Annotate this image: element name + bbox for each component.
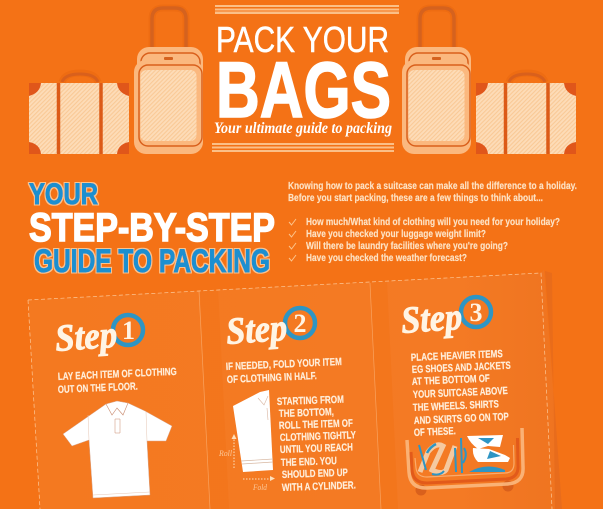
step 1 text (58, 366, 177, 396)
panel: step 1 (54, 314, 177, 498)
arrows: roll and fold: Fold (252, 483, 268, 492)
step 1 text: OUT ON THE FLOOR. (58, 381, 138, 396)
heading: your step-by-step guide to packing: STEP-BY-STEP (29, 206, 275, 250)
title block: PACK YOUR (216, 19, 389, 60)
icon: polo shirt (63, 401, 172, 498)
checklist: Have you checked the weather forecast? (306, 253, 467, 264)
checklist: Will there be laundry facilities where you're going? (306, 241, 508, 252)
checklist: Have you checked your luggage weight limit? (306, 229, 486, 240)
step 2 instructions: THE BOTTOM, (279, 406, 334, 420)
step 2 instructions: CLOTHING TIGHTLY (280, 429, 356, 444)
step 2 intro text (226, 356, 342, 386)
step 3 instructions: OF THESE. (414, 425, 456, 439)
icon: right trolley case (402, 8, 471, 154)
panel: step 3 (400, 296, 523, 496)
arrows: roll and fold: Roll (218, 449, 233, 458)
step 2 instructions: SHOULD END UP (282, 467, 348, 481)
step 3 instructions: EG SHOES AND JACKETS (412, 360, 511, 376)
step 1 number badge (113, 315, 143, 345)
step 3 heading: Step (400, 296, 463, 342)
title block: Your ultimate guide to packing (214, 120, 392, 137)
step 2 intro text: OF CLOTHING IN HALF. (227, 370, 317, 386)
step 3 instructions (411, 348, 511, 439)
title block (212, 5, 399, 152)
title block: BAGS (216, 45, 391, 134)
step 3 instructions: PLACE HEAVIER ITEMS (411, 348, 503, 364)
intro text: Before you start packing, these are a few things to think about... (288, 193, 543, 204)
heading: your step-by-step guide to packing (29, 178, 275, 279)
heading: your step-by-step guide to packing: GUIDE TO PACKING (34, 243, 270, 279)
panel: step 2 (218, 307, 356, 494)
step 2 heading: Step (225, 307, 288, 353)
arrows: roll and fold (218, 434, 275, 492)
step 3 instructions: AT THE BOTTOM OF (412, 373, 490, 388)
step 3 instructions: AND SKIRTS GO ON TOP (414, 411, 509, 427)
checklist (289, 217, 560, 264)
heading: your step-by-step guide to packing: YOUR (29, 178, 98, 211)
step 3 number badge (461, 297, 491, 327)
step 2 instructions (277, 394, 356, 494)
step 2 instructions: STARTING FROM (277, 394, 344, 408)
step 1 text: LAY EACH ITEM OF CLOTHING (58, 366, 177, 383)
icon: right suitcase (476, 73, 576, 154)
step 2 instructions: THE END. YOU (281, 455, 337, 469)
step 2 instructions: UNTIL YOU REACH (280, 441, 353, 456)
icon: left trolley case (134, 8, 203, 154)
step 1 number badge: 1 (122, 316, 135, 345)
step 3 instructions: YOUR SUITCASE ABOVE (413, 385, 508, 401)
icon: open suitcase with shoes (407, 428, 523, 496)
icon: left suitcase (29, 73, 129, 154)
checklist: How much/What kind of clothing will you need for your holiday? (306, 217, 560, 228)
step 3 number badge: 3 (470, 298, 482, 327)
step 2 number badge (285, 308, 315, 338)
step 2 instructions: WITH A CYLINDER. (282, 479, 356, 494)
step 1 heading: Step (54, 314, 118, 360)
icon: folded shirt (233, 390, 273, 472)
step 2 number badge: 2 (294, 309, 306, 338)
step 3 instructions: THE WHEELS. SHIRTS (413, 398, 499, 414)
step 2 intro text: IF NEEDED, FOLD YOUR ITEM (226, 356, 342, 373)
step 2 instructions: ROLL THE ITEM OF (279, 417, 353, 432)
intro text (288, 181, 577, 204)
panel: fold-out steps card (28, 270, 562, 509)
